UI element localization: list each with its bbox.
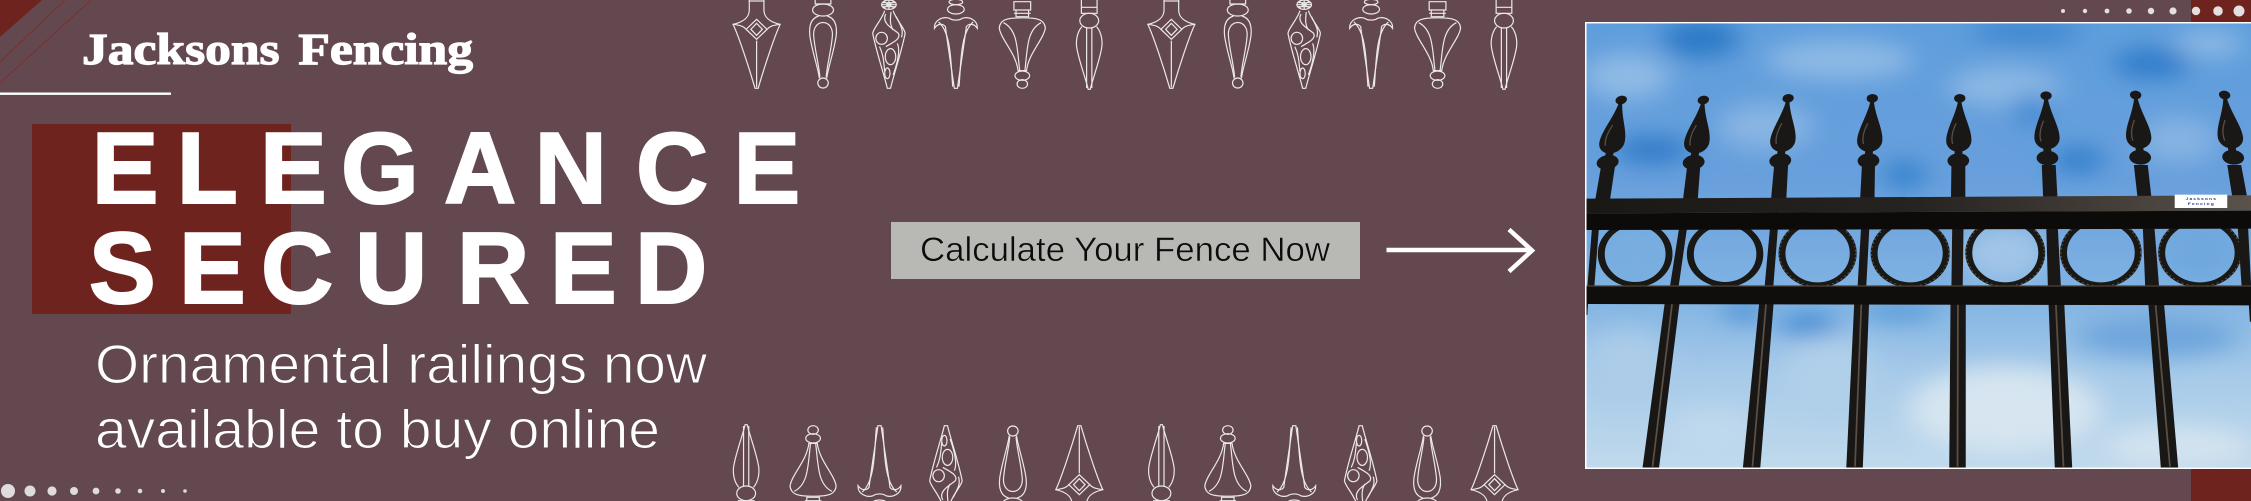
pickets above rail (1595, 165, 2247, 200)
ornamental rings between rails (1598, 228, 2240, 286)
red block behind heading (32, 124, 291, 314)
picket highlights (1653, 300, 2170, 467)
sticker on rail (2175, 195, 2227, 208)
logo underline (0, 92, 171, 95)
sticker on rail: Jacksons (2186, 197, 2217, 201)
pickets below rail (1587, 297, 2251, 468)
bottom rail (1587, 285, 2251, 305)
top rail (1587, 195, 2251, 230)
subheading text: Ornamental railings now (95, 333, 707, 395)
heading: Elegance Secured (89, 113, 800, 325)
heading: Elegance Secured: ELEGANCE (92, 113, 800, 225)
top row of finial outlines (733, 0, 1517, 89)
subheading text (95, 333, 707, 460)
logo: Jacksons Fencing: Jacksons Fencing (82, 25, 473, 74)
call to action button: Calculate Your Fence Now (920, 231, 1330, 269)
photo frame (1585, 22, 2251, 469)
bottom row of finial outlines (733, 425, 1518, 501)
decorative dots bottom left (1, 484, 187, 498)
sticker on rail: Fencing (2188, 202, 2214, 206)
call to action button (891, 222, 1360, 279)
heading: Elegance Secured: SECURED (89, 213, 707, 325)
arrow pointing to photo (1386, 230, 1532, 272)
pickets between rails (1588, 228, 2251, 286)
photo: black ornamental railing against blue sky (1583, 20, 2251, 468)
decorative dots top right (2061, 6, 2244, 16)
spear finials on the railing (1593, 91, 2247, 170)
subheading text: available to buy online (95, 398, 660, 460)
